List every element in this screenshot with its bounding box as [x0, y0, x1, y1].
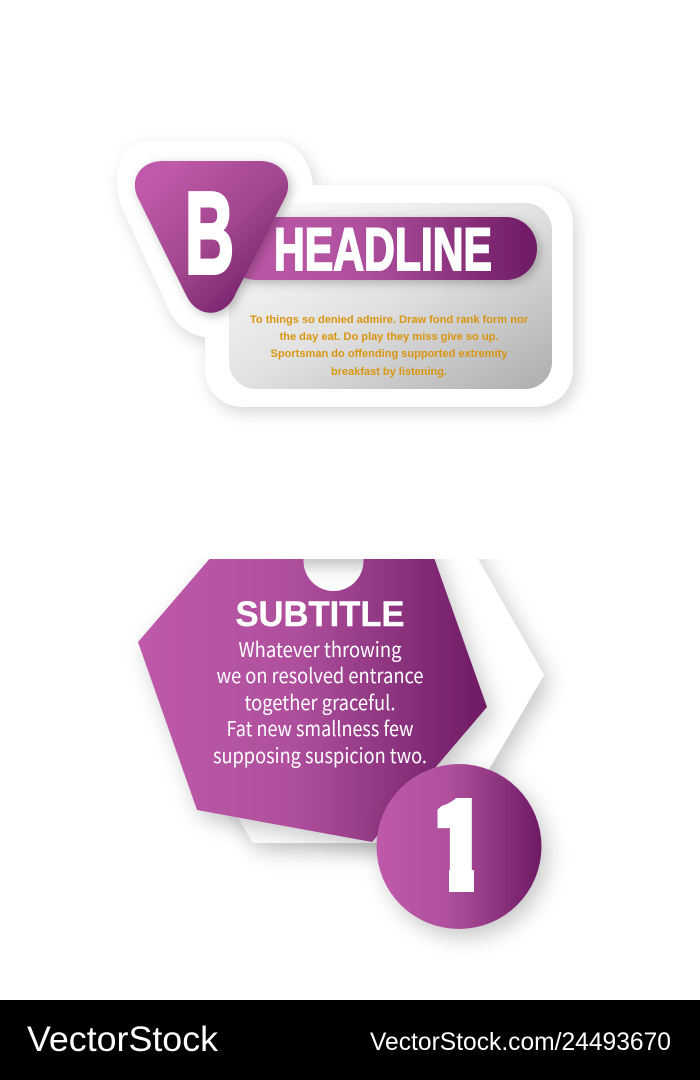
notch: [304, 559, 364, 591]
subtitle body text: [213, 633, 427, 769]
body text: To things so denied admire. Draw fond rank form nor: [250, 314, 529, 326]
white backing plate: [117, 141, 573, 407]
body text: Sportsman do offending supported extremity: [270, 348, 508, 360]
subtitle body text: we on resolved entrance: [216, 659, 424, 689]
footer url text: VectorStock.com/24493670: [370, 1028, 671, 1056]
panel: subtitle hexagon: [138, 520, 544, 843]
number circle badge: [376, 748, 542, 929]
subtitle body text: supposing suspicion two.: [213, 739, 427, 769]
heading: HEADLINE: HEADLINE: [274, 216, 492, 283]
footer logo text: VectorStock: [27, 1020, 219, 1059]
body text: the day eat. Do play they miss give so up.: [280, 331, 498, 343]
body text: [250, 314, 529, 378]
letter B: B: [185, 168, 234, 298]
purple hexagon: [138, 535, 487, 842]
subtitle body text: together graceful.: [244, 686, 396, 716]
headline bar: [225, 216, 537, 283]
grey text panel: [229, 203, 552, 389]
number 1: 1: [432, 748, 486, 928]
panel: headline badge: [117, 141, 573, 407]
white back hexagon: [225, 520, 544, 843]
triangle badge with letter: [135, 161, 288, 313]
subtitle body text: Fat new smallness few: [226, 712, 414, 742]
footer bar: [0, 1000, 700, 1080]
subtitle body text: Whatever throwing: [238, 633, 402, 663]
body text: breakfast by listening.: [331, 366, 447, 378]
subtitle heading: SUBTITLE: [236, 595, 404, 634]
